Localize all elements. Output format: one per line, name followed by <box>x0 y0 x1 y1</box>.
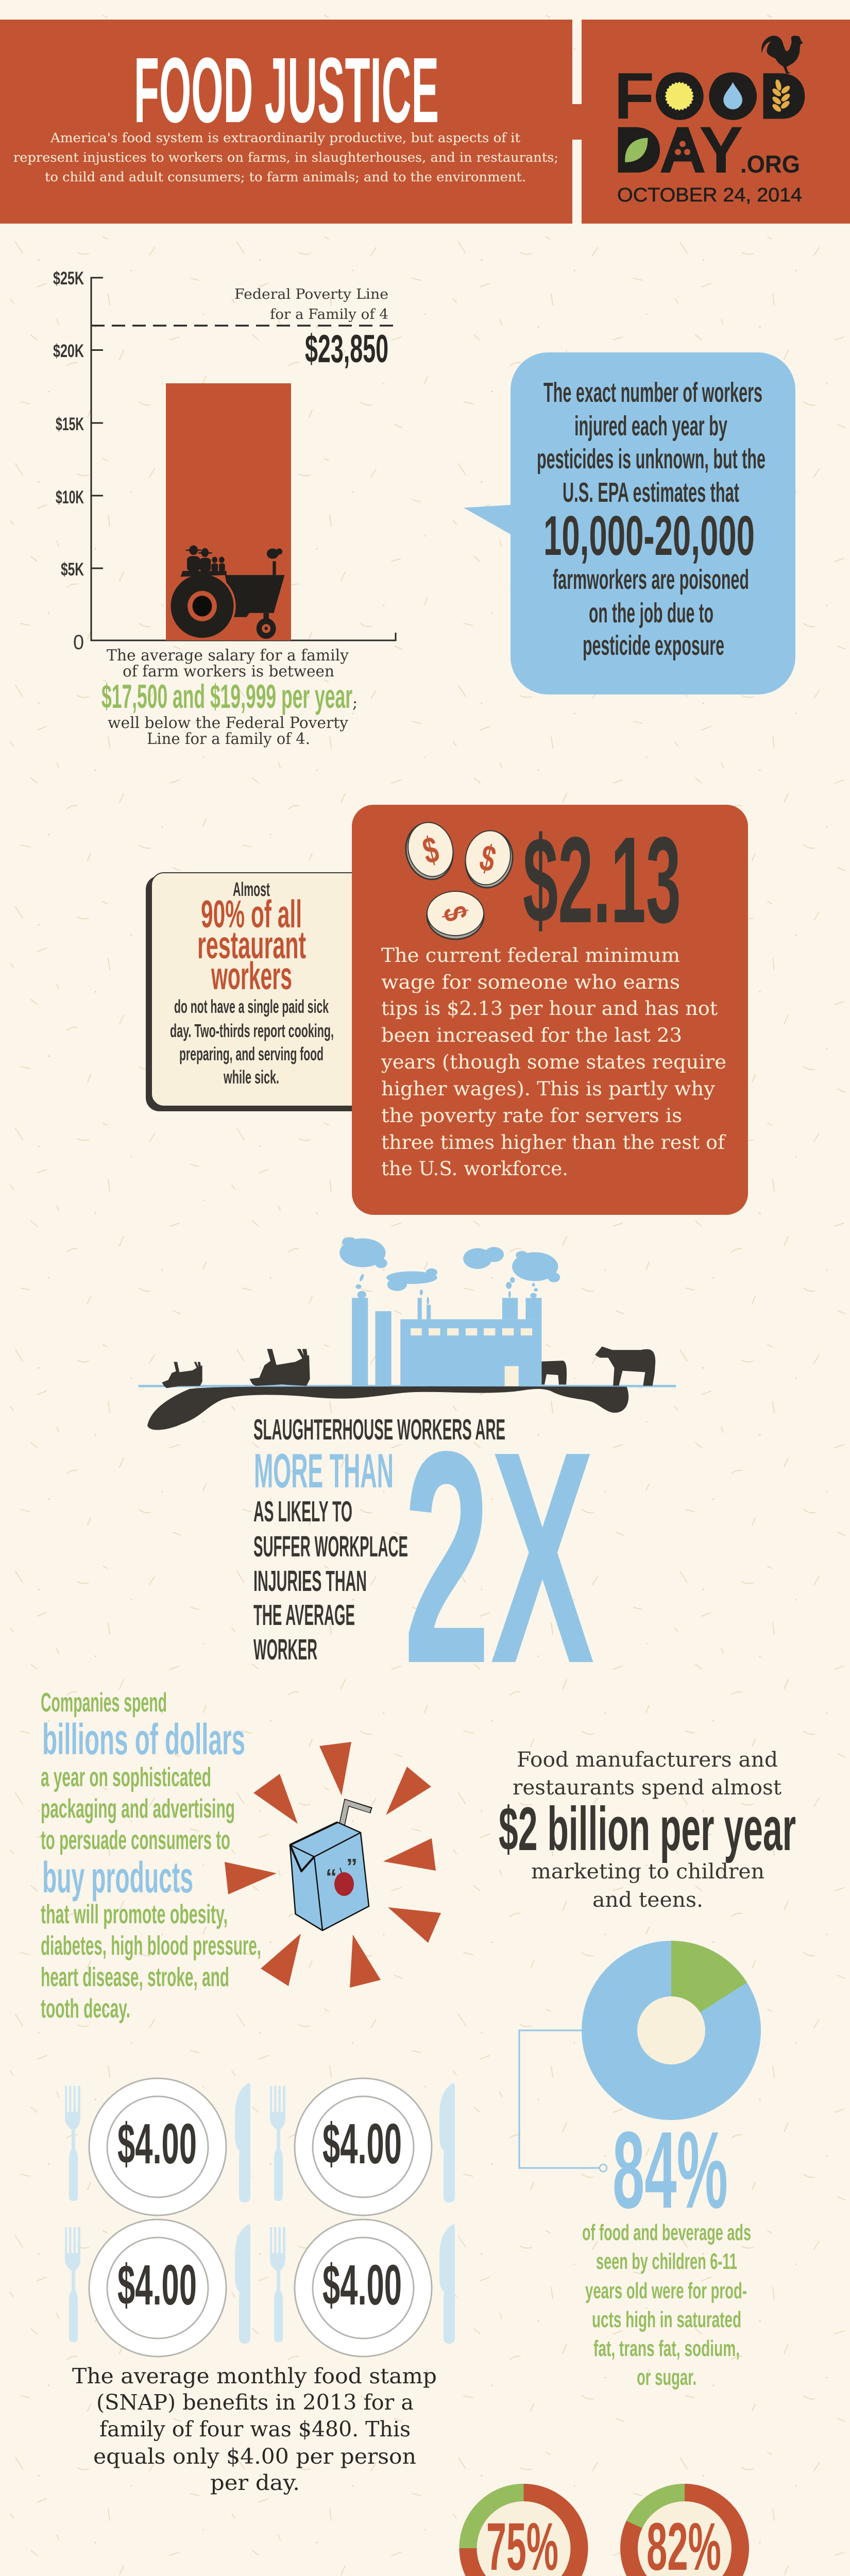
poverty value: $23,850 <box>305 327 388 371</box>
y axis labels <box>53 268 84 654</box>
illustration: slaughterhouse <box>139 1237 676 1430</box>
wage text: the U.S. workforce. <box>381 1158 568 1180</box>
text: marketing spend: buy products <box>42 1853 193 1902</box>
injury text: AS LIKELY TO <box>253 1495 352 1528</box>
sick days text: while sick. <box>223 1066 279 1088</box>
salary caption: $17,500 and $19,999 per year <box>101 677 352 715</box>
y axis labels: $25K <box>53 268 84 289</box>
text: marketing spend: heart disease, stroke, and <box>41 1962 229 1992</box>
icon: plates <box>89 2078 432 2357</box>
food stamp text <box>72 2364 437 2495</box>
wage text <box>381 944 726 1180</box>
icon: coins <box>400 818 519 939</box>
icon: coins: $ <box>436 902 475 925</box>
food stamp text: (SNAP) benefits in 2013 for a <box>96 2390 414 2415</box>
food stamp text: per day. <box>210 2470 300 2495</box>
salary caption: of farm workers is between <box>123 663 334 681</box>
injury text: SUFFER WORKPLACE <box>253 1530 408 1563</box>
y axis labels: 0 <box>73 631 84 654</box>
84 percent description: or sugar. <box>637 2365 696 2390</box>
panel: restaurant workers sick days <box>146 873 378 1111</box>
logo overlay for DAY <box>618 127 693 173</box>
wage text: been increased for the last 23 <box>381 1024 682 1046</box>
chart: SNAP households <box>440 2484 780 2576</box>
callout text <box>537 377 766 661</box>
sick days text: 90% of all <box>201 892 302 936</box>
callout text: injured each year by <box>574 411 727 442</box>
text: marketing spend <box>41 1688 261 2024</box>
icon: sun <box>665 81 694 111</box>
salary caption: ; <box>352 694 358 712</box>
icon: upside-down cows <box>162 1349 310 1388</box>
bar chart: farm worker salary <box>53 268 400 748</box>
burst triangles <box>225 1742 441 1988</box>
intro text: represent injustices to workers on farms, in slaughterhouses, and in restaurants; <box>13 150 558 165</box>
apple logo: “ <box>326 1865 337 1890</box>
icon: seeds <box>675 141 690 155</box>
wage text: the poverty rate for servers is <box>381 1105 682 1127</box>
y axis labels: $10K <box>56 487 84 507</box>
y axis labels: $20K <box>53 341 84 361</box>
donut 75 percent <box>460 2484 588 2576</box>
icon: juice box with burst <box>225 1742 441 1988</box>
smoke clouds <box>339 1237 560 1304</box>
panel: tipped minimum wage <box>352 805 748 1215</box>
slaughterhouse injury statistic <box>253 1389 595 1726</box>
food stamp text: equals only $4.00 per person <box>93 2444 416 2469</box>
icon: coins: $ <box>419 829 443 872</box>
84 percent description <box>582 2220 751 2390</box>
intro text: to child and adult consumers; to farm animals; and to the environment. <box>45 170 526 184</box>
event date: OCTOBER 24, 2014 <box>617 184 802 206</box>
sick days text: day. Two-thirds report cooking, <box>170 1020 334 1041</box>
injury text: MORE THAN <box>254 1444 394 1498</box>
text: marketing spend: a year on sophisticated <box>41 1762 211 1792</box>
injury text <box>253 1413 505 1666</box>
text: marketing spend: to persuade consumers to <box>41 1825 230 1855</box>
poverty line <box>91 325 400 327</box>
plate amounts <box>117 2112 402 2317</box>
logo letter shapes <box>618 72 805 173</box>
salary caption <box>101 647 358 748</box>
ground blob <box>147 1386 628 1430</box>
icon: standing cows <box>541 1346 655 1386</box>
y axis labels: $5K <box>61 560 84 580</box>
icon: tractor with family <box>168 546 284 640</box>
poverty line label <box>234 286 388 323</box>
84 percent figure: 84% <box>613 2109 728 2231</box>
salary caption: well below the Federal Poverty <box>108 714 348 732</box>
header banner: FOOD JUSTICE <box>134 39 439 142</box>
text: marketing to children: and teens. <box>592 1888 703 1912</box>
text: marketing spend: packaging and advertising <box>41 1794 235 1824</box>
text: marketing to children: Food manufacturers and <box>517 1748 778 1772</box>
text: marketing to children: marketing to children <box>531 1860 764 1884</box>
injury text: THE AVERAGE <box>253 1599 355 1632</box>
sick days text: do not have a single paid sick <box>174 996 329 1017</box>
icon: coins: $ <box>476 837 500 880</box>
text: marketing spend: billions of dollars <box>42 1715 245 1764</box>
icon: leaf <box>625 138 648 162</box>
logo artwork <box>618 36 805 173</box>
sick days text <box>170 879 334 1088</box>
plate amounts: $4.00 <box>117 2112 197 2176</box>
plate amounts: $4.00 <box>117 2253 197 2317</box>
plate amounts: $4.00 <box>322 2253 402 2317</box>
sick days text: workers <box>211 954 292 997</box>
panel: food stamp plates <box>65 2078 455 2495</box>
poverty line label: Federal Poverty Line <box>234 286 388 302</box>
poverty line label: for a Family of 4 <box>270 307 388 323</box>
84 percent description: of food and beverage ads <box>582 2220 751 2245</box>
text: marketing spend: diabetes, high blood pressure, <box>41 1931 261 1961</box>
intro text: America's food system is extraordinarily productive, but aspects of it <box>50 130 520 145</box>
salary caption: The average salary for a family <box>107 647 349 665</box>
food stamp text: The average monthly food stamp <box>72 2364 437 2388</box>
text: marketing spend: that will promote obesity, <box>41 1900 228 1929</box>
84 percent description: years old were for prod- <box>585 2278 747 2303</box>
84 percent description: seen by children 6-11 <box>596 2249 737 2274</box>
sick days text: Almost <box>233 879 270 901</box>
header banner <box>0 20 850 224</box>
straw <box>341 1803 371 1832</box>
text: marketing to children <box>499 1748 796 1912</box>
food stamp text: family of four was $480. This <box>99 2417 411 2442</box>
injury text: WORKER <box>253 1633 317 1666</box>
donut 82 percent <box>620 2484 749 2576</box>
carton <box>290 1822 369 1930</box>
84 percent description: fat, trans fat, sodium, <box>593 2336 740 2361</box>
salary caption: Line for a family of 4. <box>147 730 310 748</box>
chart: 84 percent donut <box>519 1941 761 2390</box>
icon: water drop <box>723 82 742 109</box>
wage figure: $2.13 <box>523 812 681 948</box>
callout text: pesticide exposure <box>583 630 724 661</box>
logo domain: .ORG <box>740 151 800 178</box>
icon: cutlery <box>65 2083 455 2344</box>
wage text: higher wages). This is partly why <box>381 1078 715 1100</box>
wage text: years (though some states require <box>381 1051 726 1073</box>
text: marketing to children: restaurants spend almost <box>513 1776 781 1800</box>
wage text: The current federal minimum <box>381 944 680 967</box>
sick days text: preparing, and serving food <box>179 1043 324 1064</box>
apple logo <box>326 1854 358 1896</box>
icon: rooster <box>761 36 803 74</box>
sick days text: restaurant <box>197 923 306 967</box>
callout: pesticide poisoning <box>464 352 795 694</box>
wage text: tips is $2.13 per hour and has not <box>381 997 718 1020</box>
injury text: INJURIES THAN <box>253 1565 367 1598</box>
logo wordmark FOOD: FOOD <box>614 60 806 133</box>
text: marketing spend: tooth decay. <box>41 1994 130 2024</box>
logo wordmark DAY: DAY <box>614 113 743 187</box>
wage text: wage for someone who earns <box>381 971 680 993</box>
apple logo: ” <box>346 1854 358 1879</box>
2X figure: 2X <box>403 1389 595 1726</box>
intro text <box>13 130 558 184</box>
text: marketing spend: Companies spend <box>41 1688 167 1718</box>
plate amounts: $4.00 <box>322 2112 402 2176</box>
y axis labels: $15K <box>56 414 84 434</box>
icon: factory <box>139 1237 676 1387</box>
food day logo <box>614 36 806 206</box>
callout text: on the job due to <box>589 598 713 629</box>
84 percent description: ucts high in saturated <box>592 2307 741 2332</box>
wage text: three times higher than the rest of <box>381 1131 726 1154</box>
icon: wheat <box>771 79 791 113</box>
slaughterhouse injury statistic: SLAUGHTERHOUSE WORKERS ARE <box>253 1413 505 1446</box>
salary bar <box>166 383 291 640</box>
